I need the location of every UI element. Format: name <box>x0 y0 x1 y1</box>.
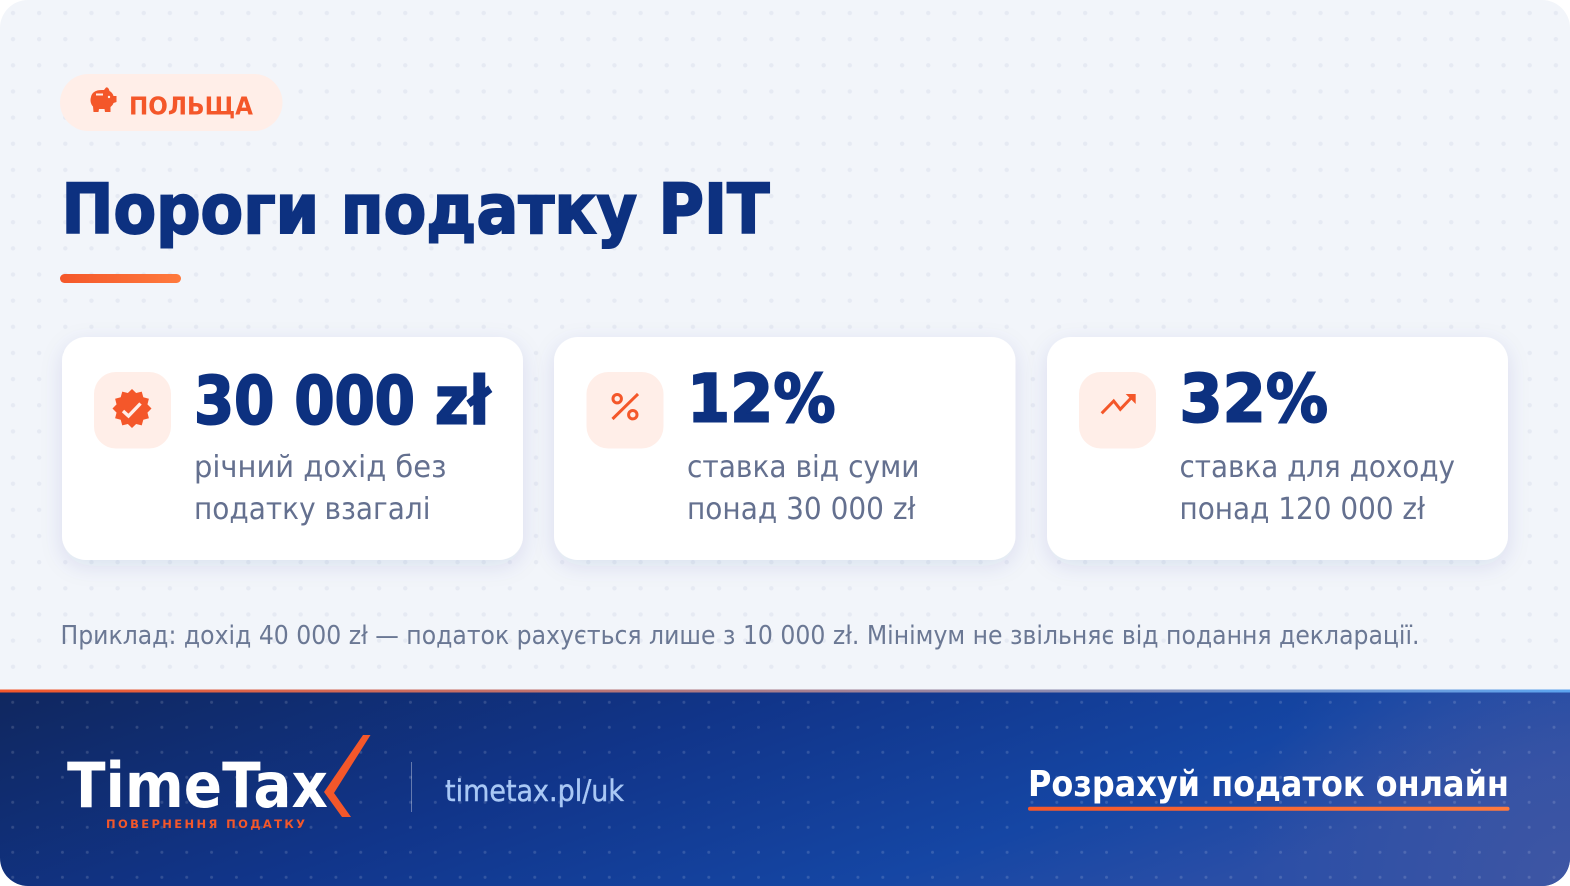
icon: percent <box>586 372 664 448</box>
description: податку взагалі <box>194 492 430 527</box>
example note: Приклад: дохід 40 000 zł — податок рахується лише з 10 000 zł. Мінімум не звільняє від подання декларації. <box>60 621 1420 651</box>
description: річний дохід без <box>194 450 446 485</box>
panel: card 32% <box>1047 337 1508 560</box>
logo chevron <box>324 735 370 817</box>
icon: piggy bank <box>91 87 116 112</box>
description <box>688 454 917 523</box>
icon: verified badge <box>94 372 171 448</box>
logo tagline: ПОВЕРНЕННЯ ПОДАТКУ <box>106 817 305 831</box>
description: понад 30 000 zł <box>687 492 916 527</box>
badge label: ПОЛЬЩА <box>129 92 254 120</box>
title underline <box>60 274 181 283</box>
badge: Польща <box>60 74 282 131</box>
call to action: Розрахуй податок онлайн <box>1028 764 1509 805</box>
title: Пороги податку PIT <box>62 170 770 250</box>
value: 30 000 zł <box>194 362 491 440</box>
footer divider <box>411 762 412 812</box>
page background <box>0 0 1570 692</box>
description <box>1181 460 1454 523</box>
icon: trend arrow <box>1079 372 1156 448</box>
logo: TimeTax: TimeTax <box>67 749 328 822</box>
panel: card 12% <box>554 337 1016 560</box>
panel: card 30 000 zł <box>62 337 523 560</box>
description: ставка від суми <box>687 450 920 485</box>
website: timetax.pl/uk <box>445 774 624 808</box>
description <box>194 450 446 527</box>
description: ставка для доходу <box>1180 450 1455 485</box>
description: понад 120 000 zł <box>1180 492 1425 527</box>
value: 32% <box>1180 360 1328 438</box>
footer band <box>0 690 1570 886</box>
value: 12% <box>687 360 836 438</box>
